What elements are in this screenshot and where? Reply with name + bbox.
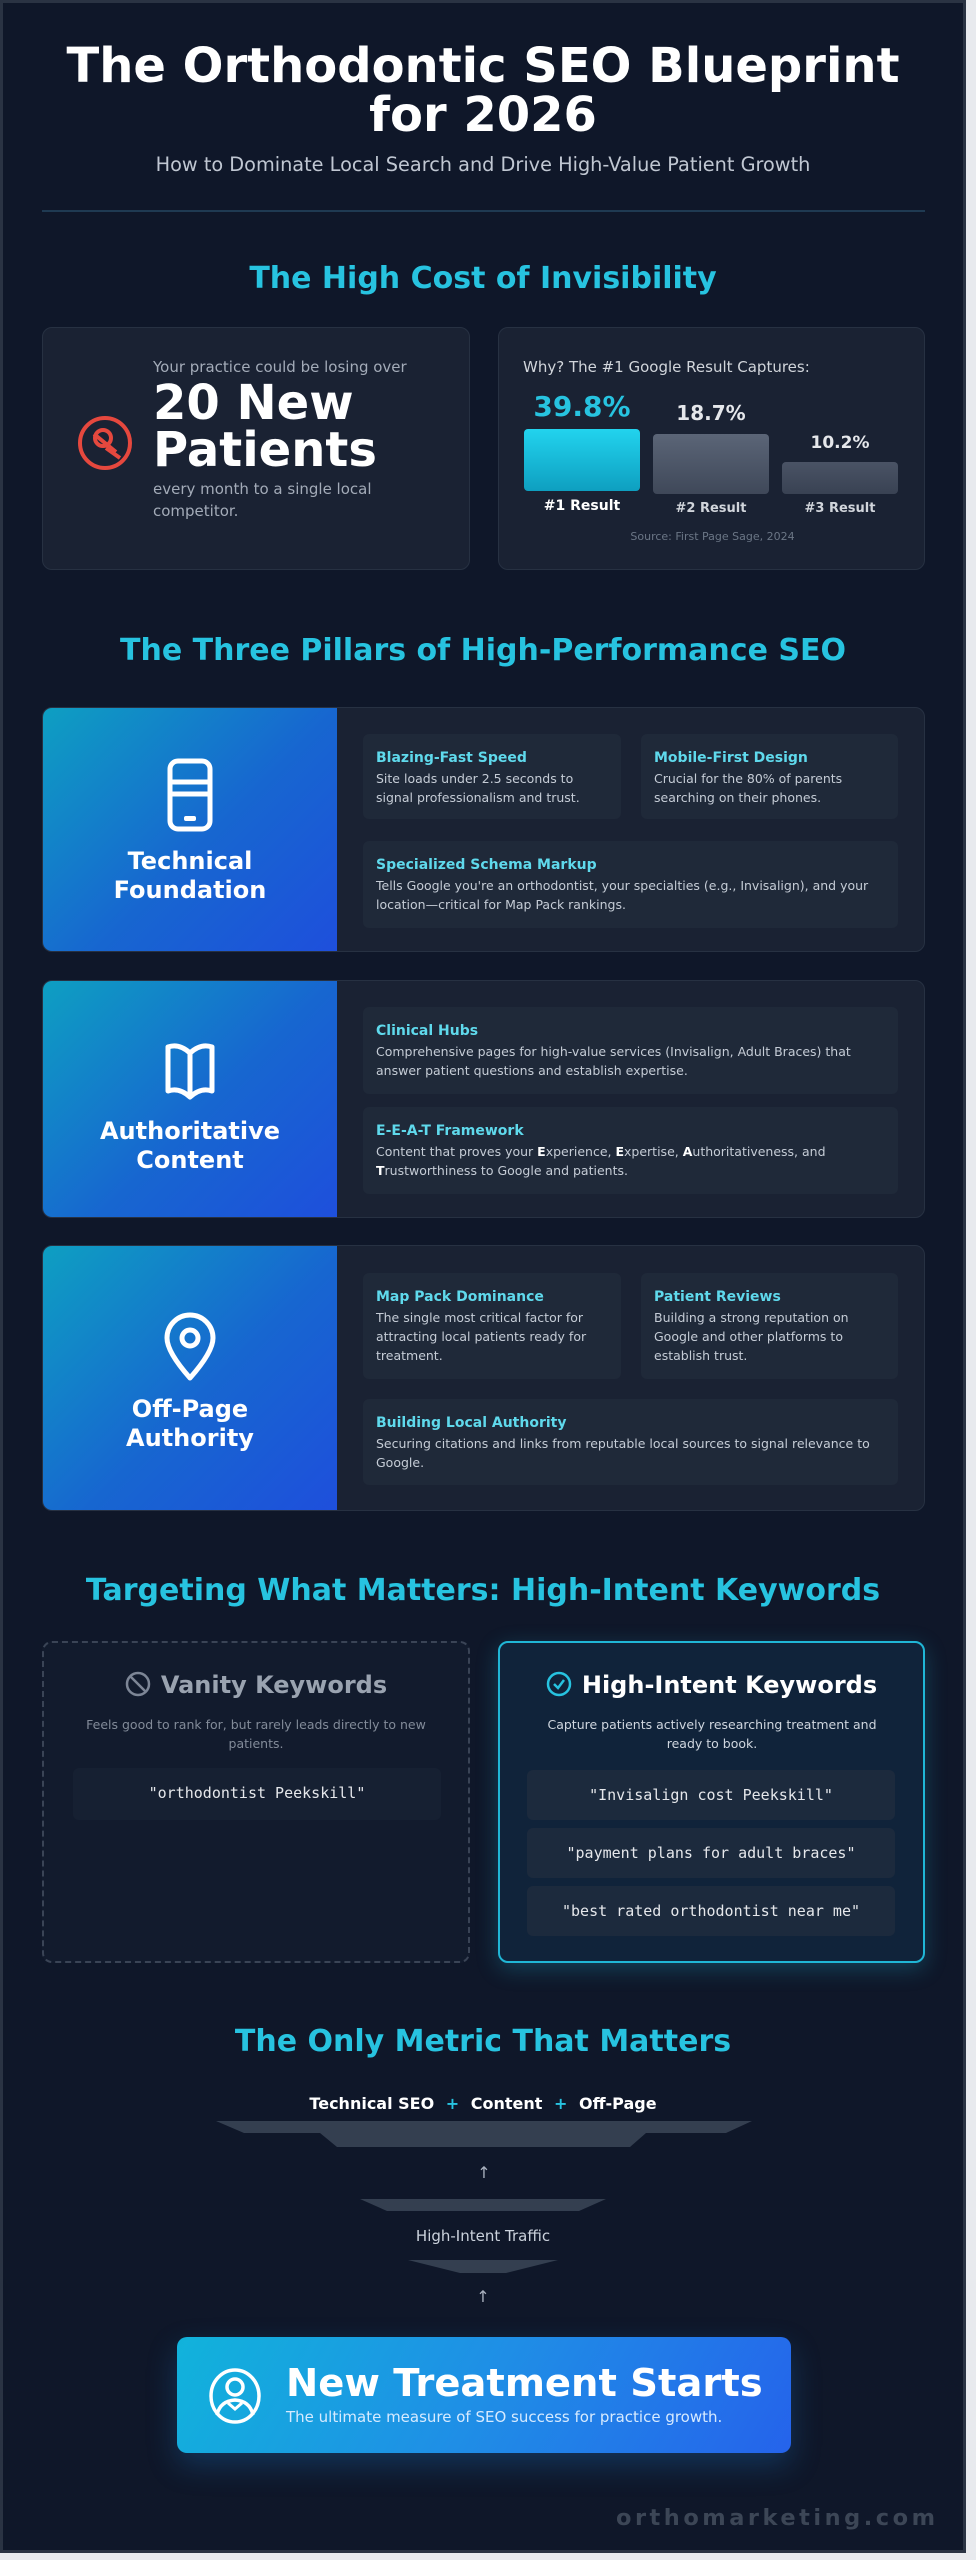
card: mobile: Mobile-First Design bbox=[654, 750, 808, 766]
card: clinical hubs: Clinical Hubs bbox=[376, 1023, 478, 1039]
heading: three pillars: The Three Pillars of High-Performance SEO bbox=[120, 633, 846, 668]
card: mobile: Crucial for the 80% of parents searching on their phones. bbox=[654, 771, 842, 805]
text: loss stat: every month to a single local bbox=[153, 480, 372, 498]
card: reviews bbox=[641, 1273, 898, 1379]
keyword: vanity bbox=[73, 1768, 441, 1820]
icon: book bbox=[166, 1043, 214, 1100]
heading: vanity: Vanity Keywords bbox=[161, 1671, 387, 1699]
card: schema bbox=[363, 841, 898, 928]
card: speed bbox=[363, 734, 621, 819]
icon: map pin bbox=[164, 1312, 216, 1380]
card: speed: Site loads under 2.5 seconds to signal professionalism and trust. bbox=[376, 771, 580, 805]
panel: technical foundation: Technical bbox=[128, 847, 252, 875]
panel: high-intent keywords: Capture patients actively researching treatment and ready to book. bbox=[547, 1717, 877, 1751]
card: clinical hubs: Comprehensive pages for high-value services (Invisalign, Adult Braces) that answer patient questions and establish expertise. bbox=[376, 1044, 851, 1078]
card: map pack: Map Pack Dominance bbox=[376, 1289, 544, 1305]
card: local authority: Securing citations and links from reputable local sources to signal relevance to Google. bbox=[376, 1436, 870, 1470]
keyword: best rated bbox=[527, 1886, 895, 1936]
card: local authority bbox=[363, 1399, 898, 1485]
funnel inputs: Technical SEO + Content + Off-Page bbox=[309, 2094, 657, 2113]
card: mobile bbox=[641, 734, 898, 819]
heading: keywords: Targeting What Matters: High-Intent Keywords bbox=[86, 1573, 880, 1608]
card: reviews: Building a strong reputation on Google and other platforms to establish trust. bbox=[654, 1310, 849, 1363]
card: map pack: The single most critical factor for attracting local patients ready for treatment. bbox=[376, 1310, 586, 1363]
panel: high-intent keywords bbox=[498, 1641, 925, 1963]
bar chart: #1 Result bbox=[544, 498, 620, 514]
card: map pack bbox=[363, 1273, 621, 1379]
title: for 2026 bbox=[369, 87, 597, 143]
callout: new treatment starts bbox=[177, 2337, 791, 2453]
callout: new treatment starts: New Treatment Starts bbox=[286, 2361, 763, 2406]
panel: authoritative content: Content bbox=[136, 1146, 244, 1174]
card: schema: Tells Google you're an orthodontist, your specialties (e.g., Invisalign), and your location—critical for Map Pack rankings. bbox=[376, 878, 868, 912]
keyword: vanity: "orthodontist Peekskill" bbox=[149, 1784, 365, 1802]
panel: google result chart: Source: First Page Sage, 2024 bbox=[630, 530, 795, 543]
funnel diagram bbox=[216, 2121, 752, 2273]
text: loss stat: competitor. bbox=[153, 502, 238, 520]
bar chart: 39.8% bbox=[533, 390, 631, 423]
panel: vanity keywords bbox=[42, 1641, 470, 1963]
bar chart: #3 Result bbox=[805, 501, 875, 516]
subtitle: How to Dominate Local Search and Drive High-Value Patient Growth bbox=[156, 153, 810, 176]
panel: vanity keywords: Feels good to rank for, but rarely leads directly to new patients. bbox=[86, 1717, 426, 1751]
card: eeat: E-E-A-T Framework bbox=[376, 1123, 524, 1139]
card: eeat: Content that proves your Experience, Expertise, Authoritativeness, and Trustworthiness to Google and patients. bbox=[376, 1144, 826, 1178]
text: loss stat bbox=[153, 358, 407, 520]
text: loss stat: Your practice could be losing over bbox=[153, 358, 407, 376]
text: loss stat: 20 New bbox=[153, 375, 354, 431]
bar chart: 18.7% bbox=[676, 401, 746, 425]
heading: high cost of invisibility: The High Cost of Invisibility bbox=[249, 261, 717, 296]
keyword: payment: "payment plans for adult braces" bbox=[566, 1844, 855, 1862]
panel: technical foundation: Foundation bbox=[114, 876, 266, 904]
heading: only metric: The Only Metric That Matters bbox=[235, 2024, 731, 2059]
panel: off-page authority bbox=[42, 1245, 925, 1511]
label: high-intent traffic: High-Intent Traffic bbox=[416, 2227, 550, 2245]
text: loss stat: Patients bbox=[153, 422, 377, 478]
icon: lost patient bbox=[78, 416, 132, 470]
footer: brand: orthomarketing.com bbox=[616, 2505, 939, 2531]
heading: high-intent: High-Intent Keywords bbox=[582, 1671, 877, 1699]
panel: authoritative content bbox=[42, 980, 925, 1218]
callout: new treatment starts: The ultimate measure of SEO success for practice growth. bbox=[286, 2408, 722, 2426]
title: The Orthodontic SEO Blueprint bbox=[66, 38, 900, 94]
keyword: payment bbox=[527, 1828, 895, 1878]
keyword: best rated: "best rated orthodontist near me" bbox=[562, 1902, 860, 1920]
bar chart bbox=[524, 390, 898, 516]
arrow: up 2: ↑ bbox=[476, 2287, 490, 2306]
card: reviews: Patient Reviews bbox=[654, 1289, 781, 1305]
keyword: invisalign bbox=[527, 1770, 895, 1820]
panel: google result chart: Why? The #1 Google Result Captures: bbox=[523, 358, 810, 376]
card: clinical hubs bbox=[363, 1007, 898, 1094]
panel: google result chart bbox=[498, 327, 925, 570]
panel: lost patients bbox=[42, 327, 470, 570]
panel: off-page authority: Off-Page bbox=[132, 1395, 248, 1423]
card: local authority: Building Local Authority bbox=[376, 1415, 566, 1431]
icon: patient bbox=[209, 2368, 261, 2424]
title bbox=[66, 38, 900, 143]
arrow: up 1: ↑ bbox=[477, 2163, 491, 2182]
panel: technical foundation bbox=[42, 707, 925, 952]
icon: phone bbox=[168, 758, 212, 832]
card: speed: Blazing-Fast Speed bbox=[376, 750, 527, 766]
bar chart: #2 Result bbox=[676, 501, 746, 516]
card: eeat bbox=[363, 1107, 898, 1194]
panel: off-page authority: Authority bbox=[126, 1424, 254, 1452]
panel: authoritative content: Authoritative bbox=[100, 1117, 280, 1145]
keyword: invisalign: "Invisalign cost Peekskill" bbox=[589, 1786, 833, 1804]
card: schema: Specialized Schema Markup bbox=[376, 857, 597, 873]
bar chart: 10.2% bbox=[810, 433, 869, 453]
